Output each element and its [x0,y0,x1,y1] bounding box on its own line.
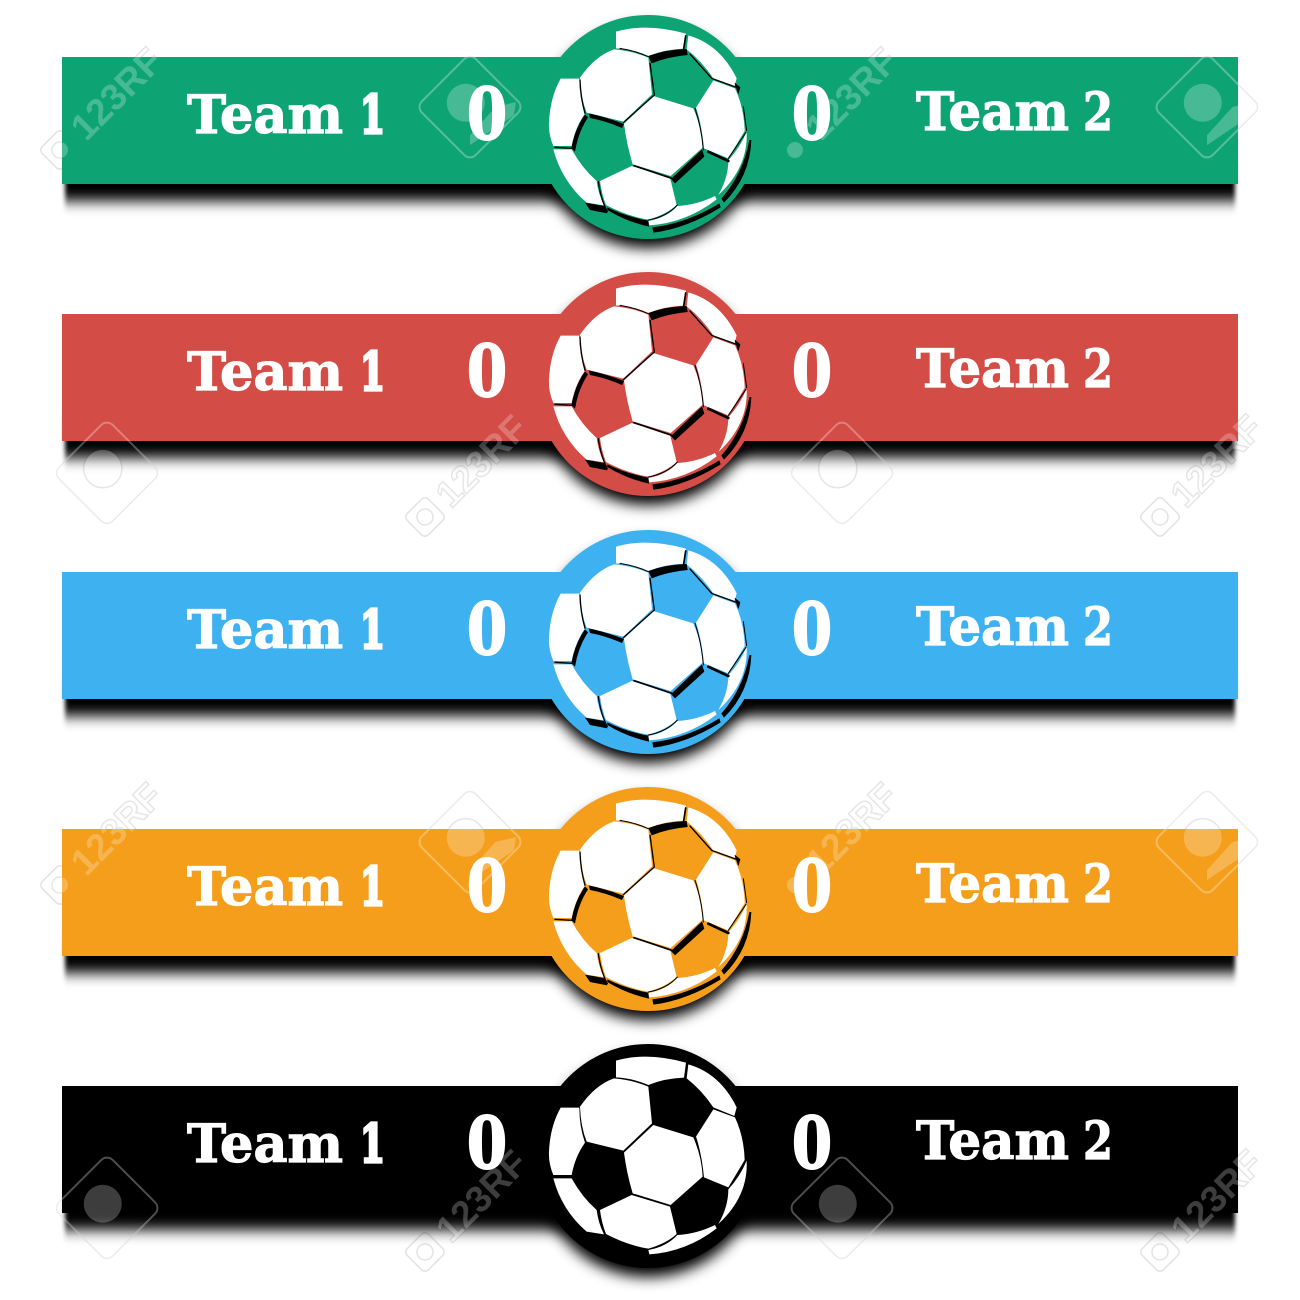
icon: green soccer ball [549,28,751,233]
text: Team 2: Team [916,82,1069,143]
watermark outlines on white: 123RF [63,775,170,883]
score: team 1: 0 [467,329,507,413]
icon: red soccer ball [549,285,751,490]
panel: green scoreboard [40,15,1261,248]
watermark outlines on white: 123RF [428,1142,535,1250]
panel: red scoreboard [53,272,1270,527]
text: Team 2: 2 [1083,597,1113,658]
score: team 2: 0 [792,72,832,156]
icon: black soccer ball [549,1057,747,1254]
panel: orange scoreboard: 123RF [798,775,905,883]
text: Team 2: Team [916,1111,1069,1172]
watermark outlines on white: 123RF [1163,1142,1270,1250]
score: team 2: 0 [792,587,832,671]
score: team 2: 0 [792,844,832,928]
panel: blue scoreboard [62,530,1238,763]
text: Team 2: 2 [1083,1111,1113,1172]
text: Team 2: 2 [1083,854,1113,915]
text: Team 1: Team [187,1114,343,1175]
panel: green scoreboard: 123RF [63,40,170,148]
icon: blue soccer ball [549,543,751,748]
panel: red scoreboard: 123RF [428,407,535,515]
panel: orange scoreboard [40,775,1261,1020]
watermark outlines on white: 123RF [1163,407,1270,515]
text: Team 1: 1 [360,600,385,661]
score: team 2: 0 [792,1101,832,1185]
text: Team 1: 1 [360,85,385,146]
score: team 1: 0 [467,1101,507,1185]
panel: black scoreboard [53,1044,1270,1277]
text: Team 2: Team [916,854,1069,915]
watermark outlines on white: 123RF [798,775,905,883]
text: Team 1: 1 [360,1114,385,1175]
panel: green scoreboard: 123RF [798,40,905,148]
icon: orange soccer ball [549,800,751,1005]
watermark outlines on white: 123RF [798,40,905,148]
watermark outlines on white: 123RF [63,40,170,148]
text: Team 2: 2 [1083,82,1113,143]
score: team 1: 0 [467,587,507,671]
text: Team 1: Team [187,85,343,146]
text: Team 1: 1 [360,857,385,918]
text: Team 2: Team [916,339,1069,400]
text: Team 1: 1 [360,342,385,403]
text: Team 1: Team [187,600,343,661]
text: Team 1: Team [187,857,343,918]
text: Team 2: Team [916,597,1069,658]
panel: red scoreboard: 123RF [1163,407,1270,515]
score: team 1: 0 [467,844,507,928]
panel: black scoreboard: 123RF [428,1142,535,1250]
text: Team 1: Team [187,342,343,403]
score: team 2: 0 [792,329,832,413]
score: team 1: 0 [467,72,507,156]
text: Team 2: 2 [1083,339,1113,400]
panel: orange scoreboard: 123RF [63,775,170,883]
panel: black scoreboard: 123RF [1163,1142,1270,1250]
watermark outlines on white: 123RF [428,407,535,515]
